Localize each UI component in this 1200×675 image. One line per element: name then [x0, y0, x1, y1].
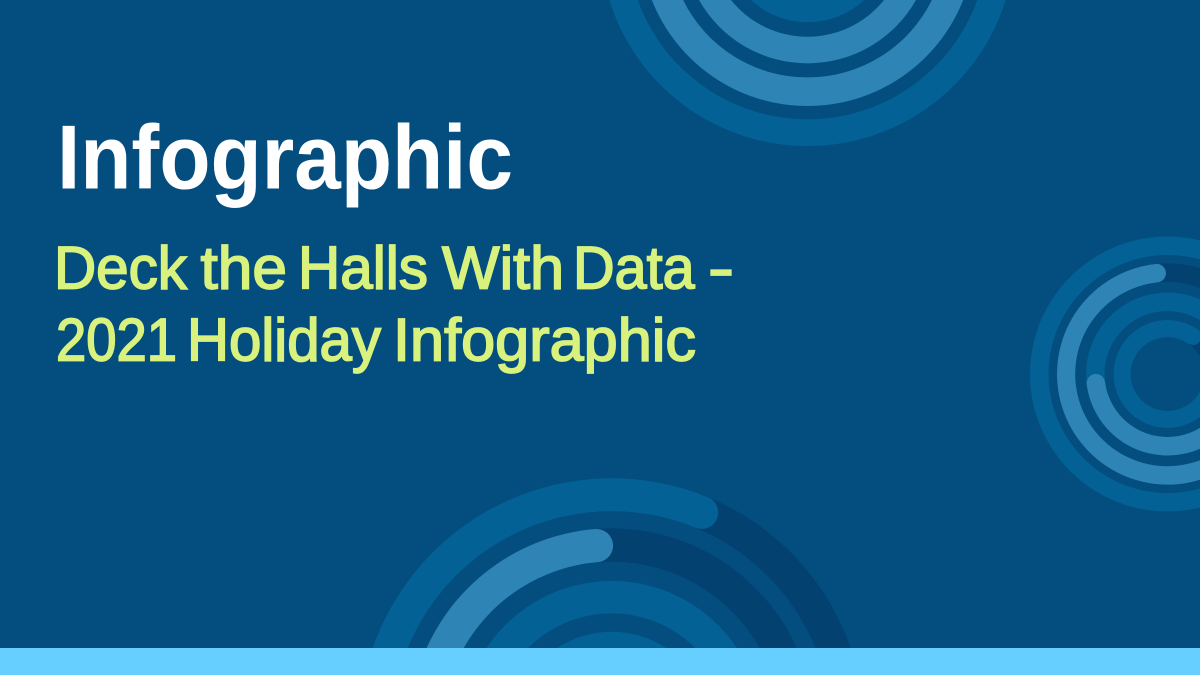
subtitle line 2: Infographic [393, 306, 696, 374]
subtitle line 1 [54, 234, 734, 301]
title: Infographic [57, 107, 513, 208]
subtitle [54, 234, 734, 374]
top concentric rings [609, 0, 1006, 146]
subtitle line 1: Halls [298, 234, 428, 301]
subtitle line 1: Data [573, 234, 695, 301]
bottom concentric rings [373, 478, 851, 648]
subtitle line 1: With [442, 234, 564, 301]
subtitle line 1: - [708, 234, 734, 301]
right concentric rings [1030, 236, 1200, 511]
subtitle line 1: the [200, 234, 287, 301]
subtitle line 2: Holiday [187, 306, 381, 374]
bottom accent bar [0, 648, 1200, 675]
subtitle line 2 [56, 306, 696, 374]
subtitle line 1: Deck [54, 234, 188, 301]
subtitle line 2: 2021 [56, 306, 177, 374]
